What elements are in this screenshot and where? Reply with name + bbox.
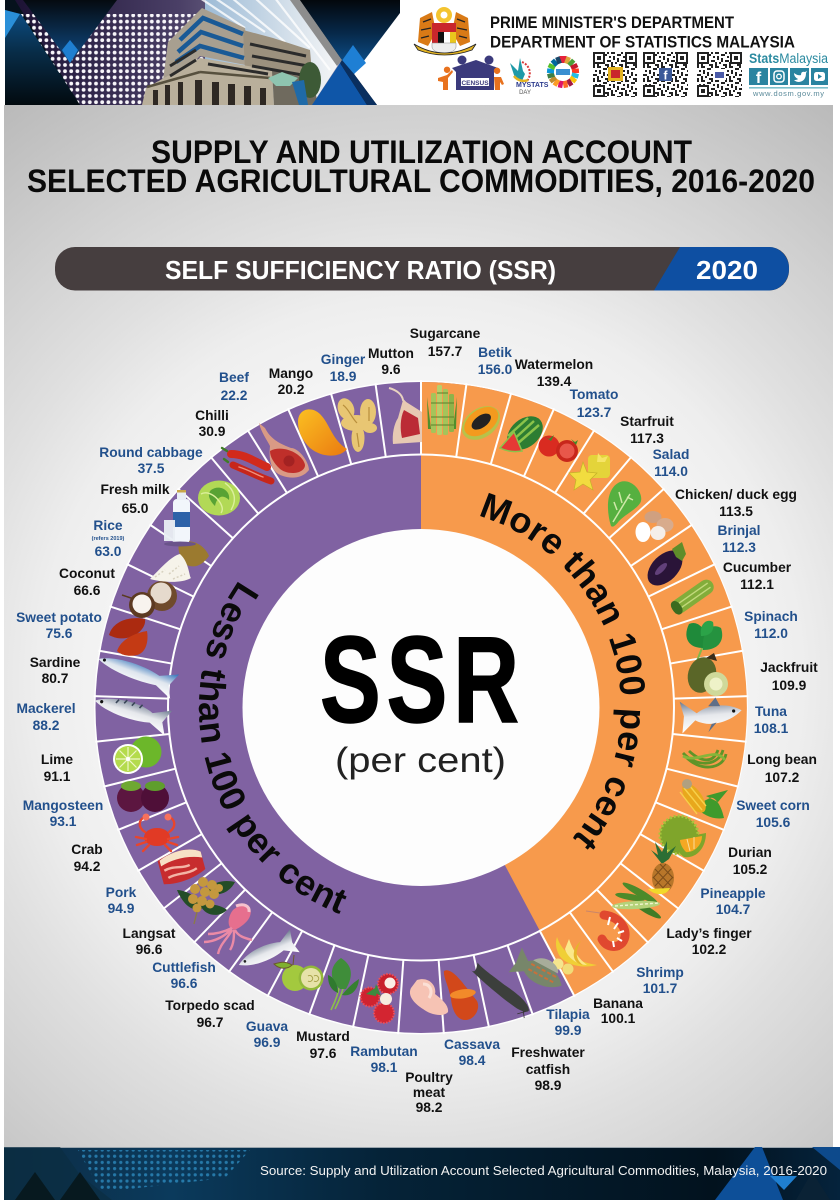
label: Pineapple: Pineapple [700, 886, 766, 901]
label: Betik: Betik [478, 345, 512, 360]
label: Mango: 20.2 [278, 382, 305, 397]
label: Beef [219, 370, 249, 403]
label: Rambutan [350, 1044, 418, 1075]
label: Banana: 100.1 [601, 1011, 636, 1026]
label: Starfruit: Starfruit [620, 414, 674, 429]
label: Rambutan: Rambutan [350, 1044, 418, 1059]
label: Rice: (refers 2019) [92, 536, 125, 542]
label: Coconut: 66.6 [74, 583, 101, 598]
label: Beef: 22.2 [221, 388, 248, 403]
icon: sweet potato [109, 618, 148, 656]
label: Lime: Lime [41, 752, 73, 767]
label: Langsat: 96.6 [136, 942, 163, 957]
icon: cassava [444, 970, 478, 1020]
label: Coconut: Coconut [59, 566, 115, 581]
label: Brinjal: 112.3 [722, 540, 756, 555]
stats malaysia social block: StatsMalaysia [749, 51, 828, 66]
icon: long bean [683, 750, 726, 767]
labels: orange half [30, 326, 818, 1115]
label: Watermelon [515, 357, 593, 389]
label: Sweet potato [16, 610, 102, 641]
center circle [242, 529, 600, 886]
QR code 3 [697, 52, 742, 97]
census logo [438, 56, 504, 90]
label: Mustard: 97.6 [310, 1046, 337, 1061]
label: Fresh milk: Fresh milk [100, 482, 170, 497]
icon: rice [150, 541, 209, 582]
label: Mackerel [16, 701, 76, 733]
label: Mustard: Mustard [296, 1029, 350, 1044]
label: Shrimp [636, 965, 684, 996]
label: Tomato [570, 387, 618, 420]
label: Rambutan: 98.1 [371, 1060, 398, 1075]
mystats day logo: MYSTATS [516, 82, 549, 89]
stats malaysia social block: f [756, 70, 762, 87]
label: Watermelon: 139.4 [537, 374, 572, 389]
label: Sugarcane: 157.7 [428, 344, 463, 359]
label: Torpedo scad [165, 998, 255, 1030]
icon: pork [157, 846, 207, 886]
label: Mangosteen: Mangosteen [23, 798, 103, 813]
coat of arms [414, 7, 476, 55]
source note: Source: Supply and Utilization Account Selected Agricultural Commodities, Malaysia, 2016-2020 [260, 1163, 827, 1178]
icon: crab [136, 814, 178, 851]
label: Mutton: Mutton [368, 346, 414, 361]
label: Shrimp: Shrimp [636, 965, 684, 980]
icon: beef [259, 423, 309, 478]
icon: ginger [335, 396, 377, 452]
label: Round cabbage: Round cabbage [99, 445, 203, 460]
icon: catfish [468, 963, 533, 1019]
label: Tomato: 123.7 [577, 405, 612, 420]
department name [490, 14, 795, 52]
label: Starfruit [620, 414, 674, 446]
label: Sweet corn [736, 798, 810, 830]
icon: eggs [636, 511, 674, 542]
label: Cuttlefish: Cuttlefish [152, 960, 216, 975]
label: Ginger: 18.9 [330, 369, 357, 384]
label: Freshwater catfish: Freshwater [511, 1045, 585, 1060]
icon: jackfruit [684, 653, 728, 696]
section banner: self sufficiency ratio [55, 247, 789, 290]
label: Jackfruit: 109.9 [772, 678, 807, 693]
label: Coconut [59, 566, 115, 598]
label: Long bean: Long bean [747, 752, 817, 767]
label: Mangosteen: 93.1 [50, 814, 77, 829]
label: Pork: Pork [106, 885, 137, 900]
icon: rambutan [360, 974, 398, 1023]
icon: spinach [686, 621, 722, 666]
label: Tilapia [546, 1007, 590, 1038]
label: Spinach: Spinach [744, 609, 798, 624]
label: Crab [71, 842, 103, 874]
purple half: less than 100 per cent [96, 382, 746, 1033]
label: Pineapple: 104.7 [716, 902, 751, 917]
curved label: less than 100 per cent: Less than 100 per cent [198, 582, 346, 914]
label: Torpedo scad: Torpedo scad [165, 998, 255, 1013]
title [27, 134, 815, 199]
label: Banana [593, 996, 643, 1026]
label: Lime [41, 752, 73, 784]
label: Tuna [754, 704, 789, 736]
label: Mango: Mango [269, 366, 313, 381]
label: Cuttlefish [152, 960, 216, 991]
mystats day logo: DAY [519, 90, 531, 96]
label: Shrimp: 101.7 [643, 981, 678, 996]
label: Cassava [444, 1037, 500, 1068]
label: Cuttlefish: 96.6 [171, 976, 198, 991]
icon: torpedo scad [234, 929, 300, 976]
icon: watermelon [500, 409, 549, 457]
labels: blue commodities [16, 345, 810, 1075]
label: Salad: 114.0 [654, 464, 688, 479]
icon: durian [660, 816, 706, 857]
label: Sweet corn: Sweet corn [736, 798, 810, 813]
title: SUPPLY AND UTILIZATION ACCOUNT [151, 134, 692, 170]
label: Guava [246, 1019, 288, 1050]
label: Mutton: 9.6 [381, 362, 401, 377]
label: Freshwater catfish: 98.9 [535, 1078, 562, 1093]
label: Sugarcane [410, 326, 481, 359]
section banner: self sufficiency ratio: SELF SUFFICIENCY RATIO (SSR) [165, 255, 556, 285]
footer banner [4, 1147, 840, 1200]
label: Jackfruit [760, 660, 818, 693]
icon: round cabbage [198, 480, 240, 516]
stats malaysia social block: www.dosm.gov.my [752, 89, 824, 98]
icon: brinjal [641, 542, 689, 592]
icon: tilapia [509, 946, 569, 997]
label: Brinjal: Brinjal [718, 523, 760, 538]
label: Fresh milk [100, 482, 170, 516]
label: Crab: 94.2 [74, 859, 101, 874]
icon: mutton [389, 388, 422, 444]
curved label: more than 100 per cent: More than 100 per cent [480, 492, 645, 850]
label: Mango [269, 366, 313, 397]
label: Brinjal [718, 523, 760, 555]
banner photo panel [5, 0, 400, 105]
label: Cucumber: 112.1 [740, 577, 774, 592]
label: Cucumber: Cucumber [723, 560, 792, 575]
icon: mustard [328, 958, 359, 1010]
label: Lady's finger: Lady’s finger [666, 926, 752, 941]
label: Mackerel: 88.2 [33, 718, 60, 733]
label: Pork: 94.9 [108, 901, 135, 916]
icon: sweet corn [678, 779, 728, 818]
building [142, 8, 321, 105]
label: Sweet corn: 105.6 [756, 815, 791, 830]
label: Tilapia: Tilapia [546, 1007, 590, 1022]
icon: coconut [122, 581, 177, 618]
label: Spinach [744, 609, 798, 641]
icon: chilli [222, 448, 271, 481]
icon: tuna [680, 695, 743, 735]
header banner [5, 0, 828, 105]
label: Langsat: Langsat [123, 926, 176, 941]
QR code 2: f [664, 68, 668, 82]
label: Betik: 156.0 [478, 362, 513, 377]
icon: salad [608, 481, 641, 527]
label: Beef: Beef [219, 370, 249, 385]
icon: starfruit [569, 453, 610, 490]
icon: lime [113, 736, 162, 774]
label: Watermelon: Watermelon [515, 357, 593, 372]
label: Chilli: Chilli [195, 408, 229, 423]
QR code 2 [643, 52, 688, 97]
label: Rice: Rice [93, 518, 123, 533]
icon: cucumber [669, 577, 717, 616]
label: Tuna: Tuna [755, 704, 787, 719]
QR code 1 [593, 52, 637, 97]
label: Guava: Guava [246, 1019, 288, 1034]
icon: papaya [455, 399, 507, 447]
label: Sardine [30, 655, 81, 686]
label: Chicken/ duck egg: 113.5 [719, 504, 753, 519]
label: Tuna: 108.1 [754, 721, 789, 736]
label: Fresh milk: 65.0 [122, 501, 149, 516]
icon: cuttlefish [204, 905, 252, 954]
label: Betik [478, 345, 513, 377]
icon: shrimp [586, 911, 625, 947]
center heading: SSR: SSR [320, 611, 519, 748]
label: Lady's finger: 102.2 [692, 942, 727, 957]
label: Tilapia: 99.9 [555, 1023, 582, 1038]
icon: mackerel [91, 688, 172, 736]
icon: poultry meat [410, 979, 448, 1015]
label: Ginger: Ginger [321, 352, 366, 367]
label: Mackerel: Mackerel [16, 701, 76, 716]
label: Cassava: 98.4 [459, 1053, 486, 1068]
mystats day logo [510, 58, 549, 96]
label: Sugarcane: Sugarcane [410, 326, 481, 341]
label: Salad [653, 447, 689, 479]
label: Freshwater catfish [511, 1045, 585, 1093]
section banner: self sufficiency ratio: 2020 [696, 255, 758, 285]
icon: mango [298, 409, 347, 456]
icon: sugarcane [427, 385, 457, 435]
center subheading: per cent: (per cent) [335, 741, 506, 780]
label: Durian [728, 845, 772, 877]
label: Sweet potato: Sweet potato [16, 610, 102, 625]
donut chart: SSR by commodity [94, 380, 748, 1034]
department name: DEPARTMENT OF STATISTICS MALAYSIA [490, 34, 795, 52]
label: Mustard [296, 1029, 350, 1061]
icon: guava [274, 955, 324, 991]
label: Banana: Banana [593, 996, 643, 1011]
orange half: more than 100 per cent [421, 382, 747, 995]
label: Spinach: 112.0 [754, 626, 788, 641]
label: Sweet potato: 75.6 [46, 626, 73, 641]
label: Starfruit: 117.3 [630, 431, 664, 446]
label: Chicken/ duck egg [675, 487, 797, 519]
label: Poultry meat: meat [413, 1085, 446, 1100]
label: Chicken/ duck egg: Chicken/ duck egg [675, 487, 797, 502]
label: Rice: 63.0 [95, 544, 122, 559]
label: Sardine: Sardine [30, 655, 81, 670]
label: Cucumber [723, 560, 792, 592]
label: Guava: 96.9 [254, 1035, 281, 1050]
label: Chilli [195, 408, 229, 439]
icon: langsat [177, 877, 235, 924]
icon: sardine [94, 647, 179, 699]
icon: tomato [538, 435, 578, 462]
label: Sardine: 80.7 [42, 671, 69, 686]
label: Poultry meat [405, 1070, 453, 1115]
label: Round cabbage [99, 445, 203, 476]
label: Langsat [123, 926, 176, 957]
label: Salad: Salad [653, 447, 689, 462]
label: Round cabbage: 37.5 [138, 461, 165, 476]
icon: banana [552, 937, 597, 974]
label: Crab: Crab [71, 842, 103, 857]
SDG wheel [547, 56, 579, 88]
label: Mutton [368, 346, 414, 377]
label: Long bean: 107.2 [765, 770, 800, 785]
label: Jackfruit: Jackfruit [760, 660, 818, 675]
stats malaysia social block [749, 51, 828, 98]
icon: lady's finger [612, 880, 663, 921]
label: Chilli: 30.9 [199, 424, 226, 439]
department name: PRIME MINISTER'S DEPARTMENT [490, 14, 734, 32]
label: Poultry meat: 98.2 [416, 1100, 443, 1115]
label: Mangosteen [23, 798, 103, 829]
commodity ring dividers [94, 380, 748, 1034]
label: Long bean [747, 752, 817, 785]
label: Durian: 105.2 [733, 862, 768, 877]
label: Poultry meat: Poultry [405, 1070, 453, 1085]
label: Lady's finger [666, 926, 752, 957]
icon: pineapple [648, 841, 676, 894]
census logo: CENSUS [461, 80, 489, 87]
icon: fresh milk [164, 490, 196, 546]
label: Pork [106, 885, 137, 916]
label: Rice [92, 518, 125, 559]
label: Torpedo scad: 96.7 [197, 1015, 224, 1030]
label: Ginger [321, 352, 366, 384]
label: Cassava: Cassava [444, 1037, 500, 1052]
label: Tomato: Tomato [570, 387, 618, 402]
icon: mangosteen [117, 781, 169, 812]
label: Pineapple [700, 886, 766, 917]
label: Lime: 91.1 [44, 769, 71, 784]
label: Durian: Durian [728, 845, 772, 860]
label: Freshwater catfish: catfish [526, 1062, 570, 1077]
